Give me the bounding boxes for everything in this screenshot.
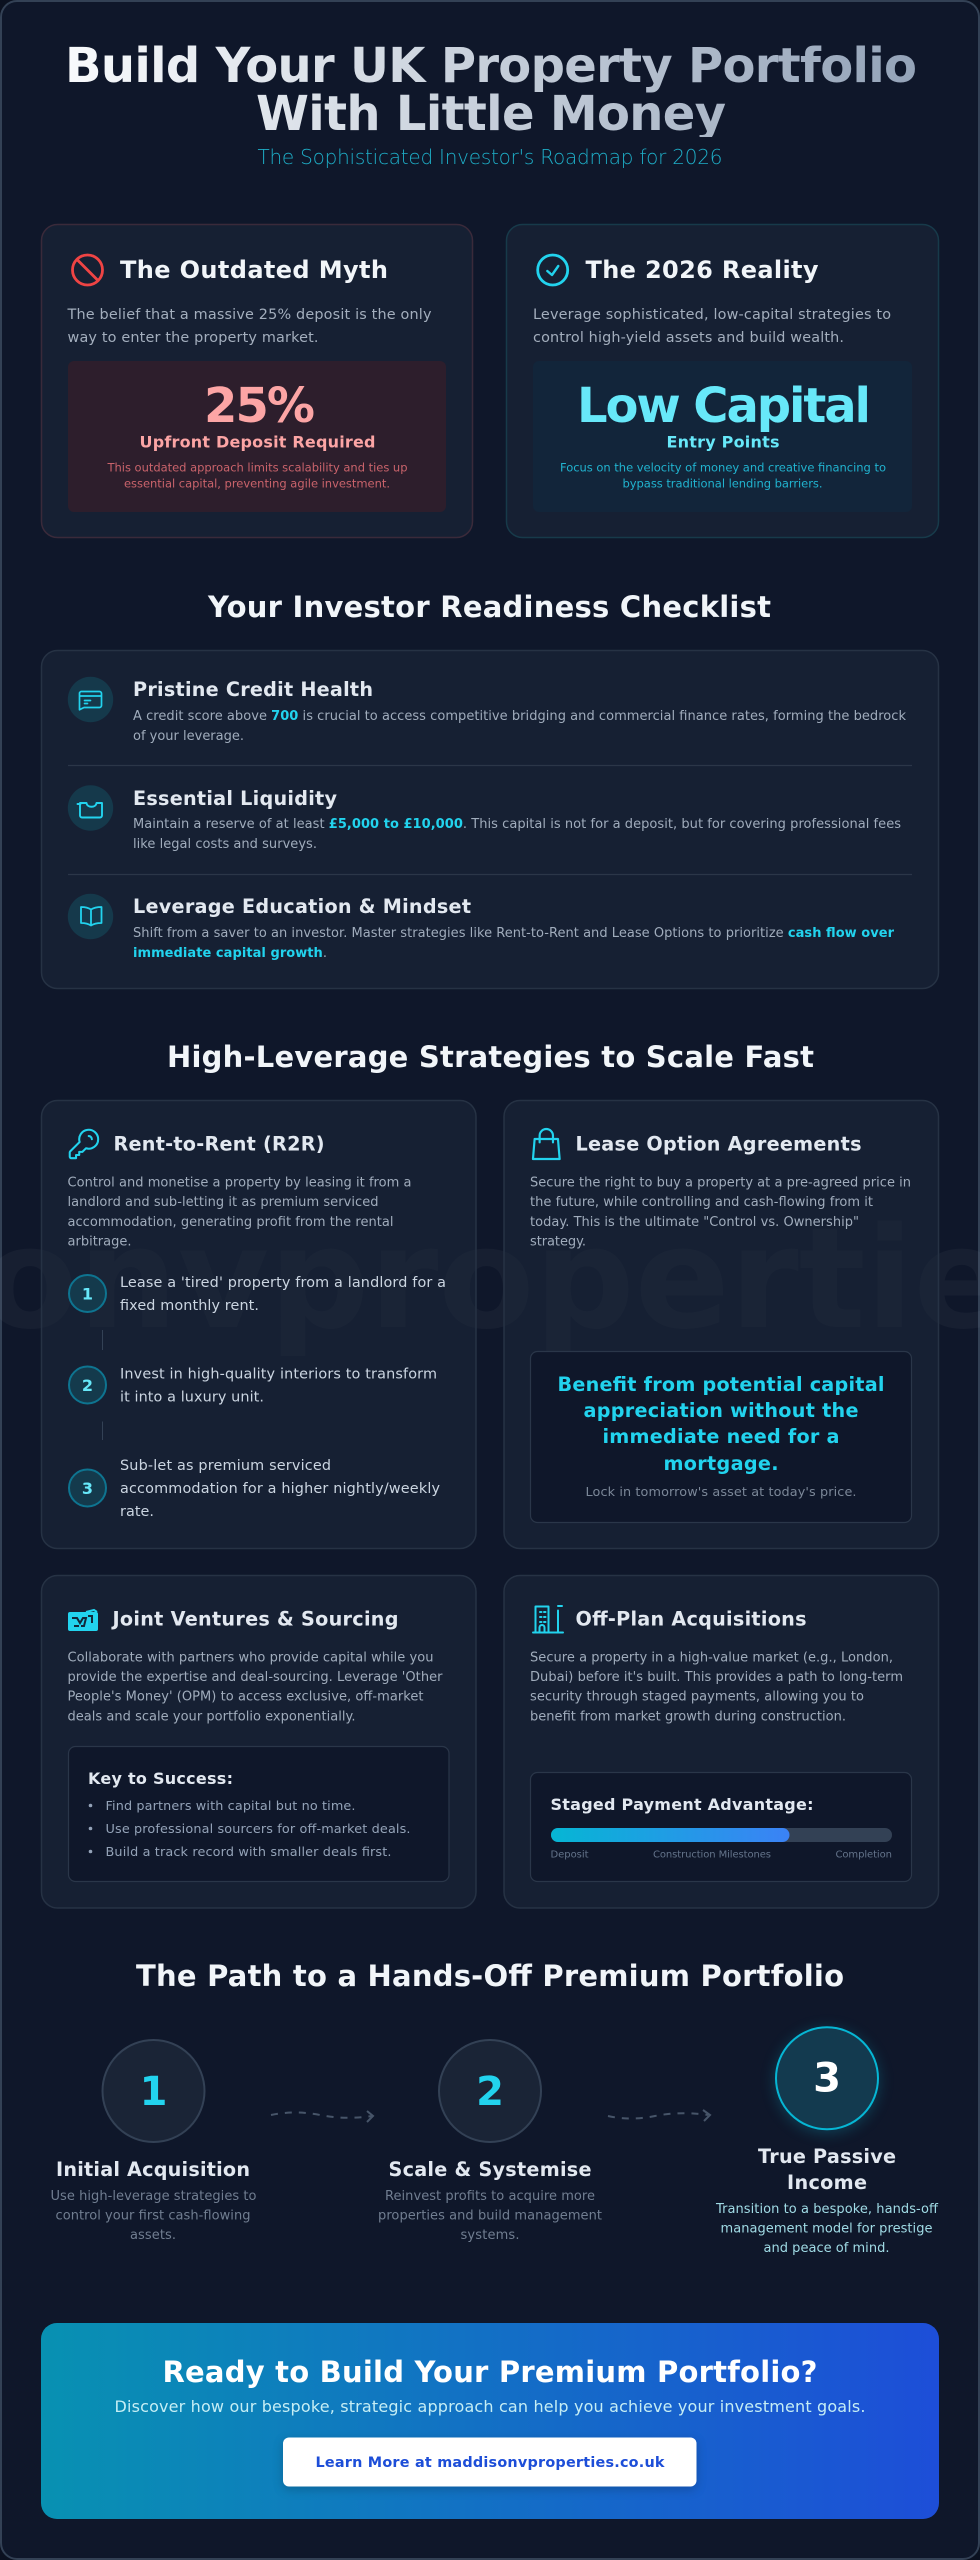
icon: check circle	[538, 255, 568, 285]
checklist item: liquidity	[68, 785, 901, 852]
liquidity heading: Essential Liquidity	[133, 787, 337, 810]
panel: the 2026 reality	[506, 224, 938, 538]
staged payment box	[530, 1772, 912, 1882]
call to action banner	[41, 2323, 939, 2519]
step 2 badge: 2	[82, 1376, 93, 1395]
liquidity text: like legal costs and surveys.	[133, 837, 317, 852]
education text	[133, 926, 895, 961]
key to success box	[68, 1746, 449, 1882]
stage 2 text: properties and build management	[378, 2208, 602, 2224]
title: With Little Money	[256, 86, 726, 142]
myth description: The belief that a massive 25% deposit is the only	[66, 307, 432, 323]
icon: handshake	[68, 1610, 98, 1631]
step 2 text: Invest in high-quality interiors to transform	[120, 1366, 437, 1382]
lease heading: Lease Option Agreements	[576, 1132, 862, 1156]
key to success list	[89, 1799, 410, 1860]
panel: checklist	[42, 650, 938, 988]
myth stat box	[68, 361, 446, 512]
reality description: Leverage sophisticated, low-capital strategies to	[533, 307, 891, 323]
reality description: control high-yield assets and build wealth.	[533, 330, 844, 346]
progress labels: Deposit	[550, 1850, 589, 1861]
credit text: A credit score above 700 is crucial to access competitive bridging and commercial finance rates, forming the bedrock	[133, 709, 906, 724]
roadmap stage 1	[50, 2040, 257, 2243]
progress bar	[551, 1828, 892, 1842]
callout text: appreciation without the	[584, 1399, 858, 1422]
myth heading: The Outdated Myth	[120, 256, 388, 284]
stage 3 text: and peace of mind.	[764, 2241, 890, 2256]
jv description: People's Money' (OPM) to access exclusive, off-market	[68, 1690, 424, 1705]
lease description	[530, 1176, 911, 1250]
reality heading: The 2026 Reality	[586, 256, 819, 284]
panel: joint ventures	[42, 1576, 476, 1908]
myth stat label: Upfront Deposit Required	[140, 432, 376, 452]
stage 3 text: Transition to a bespoke, hands-off	[715, 2202, 939, 2217]
stage 1 text: assets.	[130, 2228, 176, 2243]
stage 3 heading: Income	[787, 2171, 867, 2194]
off-plan description: Secure a property in a high-value market (e.g., London,	[530, 1651, 893, 1666]
reality stat note: Focus on the velocity of money and creative financing to	[560, 460, 886, 474]
myth stat note	[106, 460, 408, 490]
stage 1 text: control your first cash-flowing	[56, 2208, 250, 2224]
icon: prohibited	[72, 255, 102, 285]
step 3 text: Sub-let as premium serviced	[120, 1458, 331, 1474]
progress labels: Construction Milestones	[653, 1850, 771, 1861]
roadmap stage 3	[715, 2027, 939, 2256]
off-plan description: Dubai) before it's built. This provides a path to long-term	[530, 1670, 903, 1685]
myth stat note: essential capital, preventing agile investment.	[124, 476, 390, 490]
stage 1 circle: 1	[140, 2069, 167, 2115]
jv description: deals and scale your portfolio exponentially.	[68, 1709, 356, 1724]
step 1 badge: 1	[82, 1284, 93, 1304]
step 3 text: rate.	[120, 1504, 154, 1520]
subtitle: The Sophisticated Investor's Roadmap for 2026	[258, 145, 722, 169]
stage 2 circle	[439, 2040, 541, 2142]
stage 1 text	[50, 2189, 257, 2243]
cta heading: Ready to Build Your Premium Portfolio?	[162, 2355, 818, 2389]
stage 3 text	[715, 2202, 939, 2256]
myth stat: 25%	[204, 378, 315, 434]
key to success list: Use professional sourcers for off-market deals.	[106, 1822, 410, 1837]
arrow: stage 1 to 2	[271, 2111, 373, 2122]
stage 2 circle: 2	[476, 2069, 504, 2115]
step 2 badge	[69, 1366, 106, 1404]
reality stat note	[560, 460, 886, 490]
liquidity text	[133, 817, 901, 852]
reality stat box	[533, 361, 912, 512]
icon: office building	[533, 1606, 563, 1632]
title: Build Your UK Property Portfolio	[65, 38, 917, 94]
reality description	[533, 307, 891, 346]
education text: immediate capital growth.	[133, 946, 327, 961]
title	[69, 46, 915, 137]
key to success heading: Key to Success:	[88, 1769, 233, 1788]
credit text: of your leverage.	[133, 729, 244, 744]
r2r description: landlord and sub-letting it as premium serviced	[68, 1195, 378, 1210]
callout: capital appreciation	[530, 1352, 912, 1522]
myth description: way to enter the property market.	[68, 330, 318, 346]
stage 2 text: Reinvest profits to acquire more	[385, 2189, 595, 2204]
stage 3 circle: 3	[813, 2056, 841, 2102]
checklist item: credit	[68, 677, 906, 744]
step 1 badge	[69, 1275, 106, 1312]
callout text: mortgage.	[664, 1452, 778, 1475]
stage 3 circle	[775, 2027, 879, 2133]
r2r heading: Rent-to-Rent (R2R)	[114, 1132, 324, 1156]
off-plan description: benefit from market growth during construction.	[530, 1709, 846, 1724]
step 1 text: Lease a 'tired' property from a landlord for a	[120, 1275, 446, 1291]
key to success list: Find partners with capital but no time.	[106, 1799, 356, 1814]
credit text	[133, 709, 906, 744]
reality stat note: bypass traditional lending barriers.	[622, 476, 822, 490]
myth description	[66, 307, 432, 346]
stage 3 text: management model for prestige	[720, 2222, 932, 2236]
education heading: Leverage Education & Mindset	[133, 895, 471, 918]
stage 3 heading: True Passive	[758, 2145, 896, 2168]
cta button: Learn More at maddisonvproperties.co.uk	[316, 2455, 665, 2471]
credit heading: Pristine Credit Health	[133, 678, 373, 701]
step 1 text: fixed monthly rent.	[120, 1298, 259, 1314]
stage 2 text	[378, 2189, 602, 2243]
cta subheading: Discover how our bespoke, strategic approach can help you achieve your investment goals.	[114, 2397, 866, 2416]
reality stat: Low Capital	[577, 378, 871, 434]
callout text: immediate need for a	[602, 1425, 840, 1448]
stage 1 text: Use high-leverage strategies to	[50, 2189, 257, 2204]
reality stat label: Entry Points	[666, 432, 780, 452]
roadmap stage 2	[378, 2040, 602, 2243]
progress labels: Completion	[836, 1850, 892, 1861]
icon: key	[70, 1130, 98, 1158]
callout text	[558, 1373, 884, 1475]
step 3 text: accommodation for a higher nightly/weekly	[120, 1481, 440, 1497]
r2r description: accommodation, generating profit from the rental	[68, 1215, 394, 1230]
myth stat note: This outdated approach limits scalability and ties up	[106, 460, 408, 474]
r2r description: Control and monetise a property by leasing it from a	[68, 1176, 412, 1190]
icon: wallet	[68, 785, 113, 831]
lease description: strategy.	[530, 1234, 586, 1250]
off-plan heading: Off-Plan Acquisitions	[576, 1608, 806, 1631]
step 2 text: it into a luxury unit.	[120, 1390, 264, 1406]
step 1 text	[120, 1275, 446, 1314]
panel: the outdated myth	[42, 224, 472, 538]
heading: investor readiness checklist: Your Investor Readiness Checklist	[207, 590, 771, 624]
step 3 text	[120, 1458, 440, 1520]
icon: open book	[68, 894, 113, 939]
panel: rent-to-rent	[42, 1100, 476, 1548]
off-plan description	[530, 1651, 903, 1724]
step 3	[69, 1458, 440, 1520]
callout note: Lock in tomorrow's asset at today's price.	[586, 1485, 856, 1500]
lease description: today. This is the ultimate "Control vs. Ownership"	[530, 1215, 859, 1230]
r2r description: arbitrage.	[68, 1234, 132, 1250]
jv description: provide the expertise and deal-sourcing. Leverage 'Other	[68, 1670, 443, 1685]
jv description	[68, 1651, 443, 1724]
staged payment heading: Staged Payment Advantage:	[550, 1795, 814, 1814]
icon: credit card	[68, 677, 113, 722]
step 1	[69, 1275, 446, 1314]
arrow: stage 2 to 3	[608, 2110, 710, 2121]
stage 3 heading	[758, 2145, 896, 2194]
cta button	[283, 2438, 696, 2486]
step 3 badge	[69, 1470, 106, 1506]
stage 1 circle	[102, 2040, 204, 2142]
lease description: Secure the right to buy a property at a pre-agreed price in	[530, 1176, 911, 1190]
heading: path to portfolio: The Path to a Hands-Off Premium Portfolio	[136, 1959, 844, 1993]
checklist item: education	[68, 894, 895, 961]
callout text: Benefit from potential capital	[558, 1373, 884, 1396]
education text: Shift from a saver to an investor. Master strategies like Rent-to-Rent and Lease Options to prioritize cash flow over	[133, 926, 895, 941]
panel: off-plan	[504, 1576, 938, 1908]
heading: strategies: High-Leverage Strategies to Scale Fast	[167, 1040, 814, 1074]
step 3 badge: 3	[82, 1479, 93, 1498]
key to success list: Build a track record with smaller deals first.	[106, 1845, 392, 1860]
progress labels	[550, 1850, 892, 1861]
stage 2 text: systems.	[460, 2228, 520, 2243]
r2r description	[68, 1176, 412, 1250]
liquidity text: Maintain a reserve of at least £5,000 to £10,000. This capital is not for a deposit, but for covering professional fees	[133, 817, 901, 832]
jv description: Collaborate with partners who provide capital while you	[68, 1651, 434, 1666]
step 2 text	[120, 1366, 437, 1406]
step 2	[69, 1366, 437, 1406]
jv heading: Joint Ventures & Sourcing	[110, 1608, 398, 1631]
lease description: the future, while controlling and cash-flowing from it	[530, 1195, 873, 1210]
off-plan description: security through staged payments, allowing you to	[530, 1690, 864, 1705]
panel: lease options	[504, 1100, 938, 1548]
stage 1 heading: Initial Acquisition	[56, 2158, 250, 2181]
stage 2 heading: Scale & Systemise	[388, 2158, 592, 2181]
icon: shopping bag	[533, 1129, 560, 1159]
